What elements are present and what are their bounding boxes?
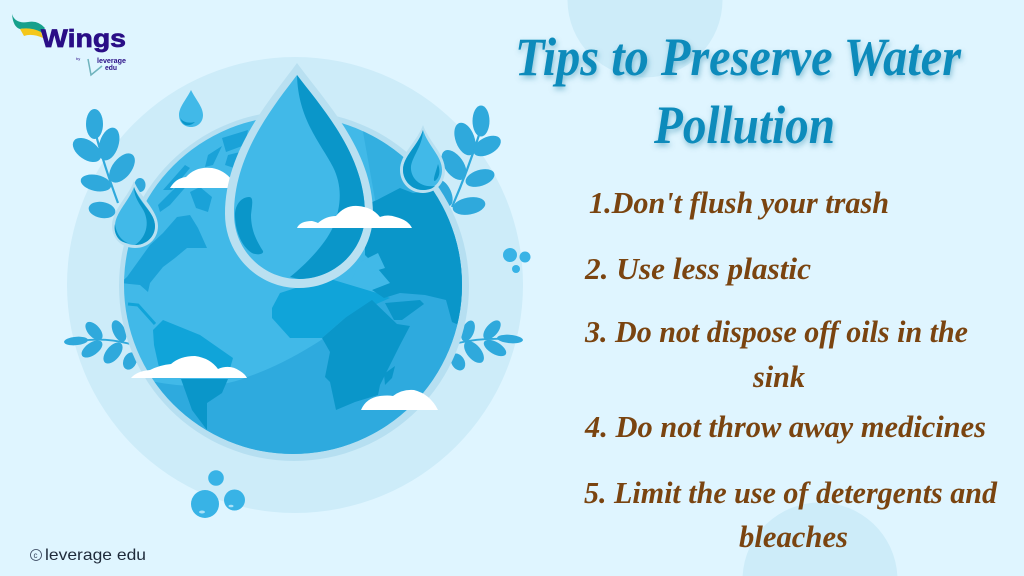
continent: madagascar	[384, 366, 395, 385]
continent: arctic islands	[163, 130, 248, 190]
tip 4: 4. Do not throw away medicines	[584, 409, 986, 444]
tip 5: 5. Limit the use of detergents and	[584, 475, 997, 510]
lower ocean shade	[154, 232, 462, 454]
mediterranean light patch	[368, 253, 385, 270]
cloud lower-right	[361, 390, 438, 410]
continent: asia	[365, 188, 462, 324]
drop highlight	[235, 197, 263, 254]
drop left	[112, 181, 158, 248]
big water drop	[225, 63, 373, 288]
continent: africa	[322, 300, 410, 410]
logo ribbon green	[12, 14, 45, 33]
continent: south america	[153, 320, 233, 372]
title: Pollution	[653, 95, 835, 155]
sprig bottom-right	[448, 317, 523, 373]
cloud lower-left	[131, 356, 247, 378]
tip 3: sink	[752, 359, 805, 394]
drop right	[400, 125, 445, 193]
sprig top-left	[68, 109, 146, 220]
logo	[12, 14, 126, 75]
continent: arabia	[385, 300, 424, 320]
drop shading	[290, 75, 365, 279]
title: Tips to Preserve Water	[515, 27, 962, 87]
pale halo circle behind globe	[67, 57, 523, 513]
top right ocean shade	[363, 131, 460, 260]
logo ribbon yellow	[20, 28, 43, 38]
logo wordmark: Wings	[41, 25, 126, 53]
continent: north america	[124, 188, 212, 292]
background circle bottom	[743, 502, 897, 576]
bubbles right	[503, 248, 530, 273]
cloud top-left	[170, 168, 232, 188]
tip 5	[584, 475, 997, 554]
tip 3: 3. Do not dispose off oils in the	[584, 314, 968, 349]
title	[515, 27, 962, 155]
globe	[115, 111, 470, 470]
bubbles bottom	[191, 470, 245, 518]
logo edu: edu	[105, 65, 117, 72]
drop small top	[179, 90, 203, 127]
logo leverage: leverage	[97, 58, 126, 65]
background circle top	[568, 0, 722, 78]
tip 5: bleaches	[739, 519, 848, 554]
sprig top-right	[432, 106, 504, 217]
continent: west africa and europe	[272, 278, 390, 338]
footer copyright: leverage edu	[45, 547, 146, 564]
sprig bottom-left	[64, 318, 140, 372]
logo byline: by	[76, 56, 80, 61]
tip 3	[584, 314, 968, 394]
footer copyright: c	[34, 551, 38, 560]
tip 2: 2. Use less plastic	[584, 251, 811, 286]
logo mark	[88, 59, 102, 75]
tips list	[584, 185, 997, 554]
tip 1: 1.Don't flush your trash	[589, 185, 889, 220]
continent: central america	[128, 304, 155, 324]
cloud middle	[297, 206, 412, 228]
